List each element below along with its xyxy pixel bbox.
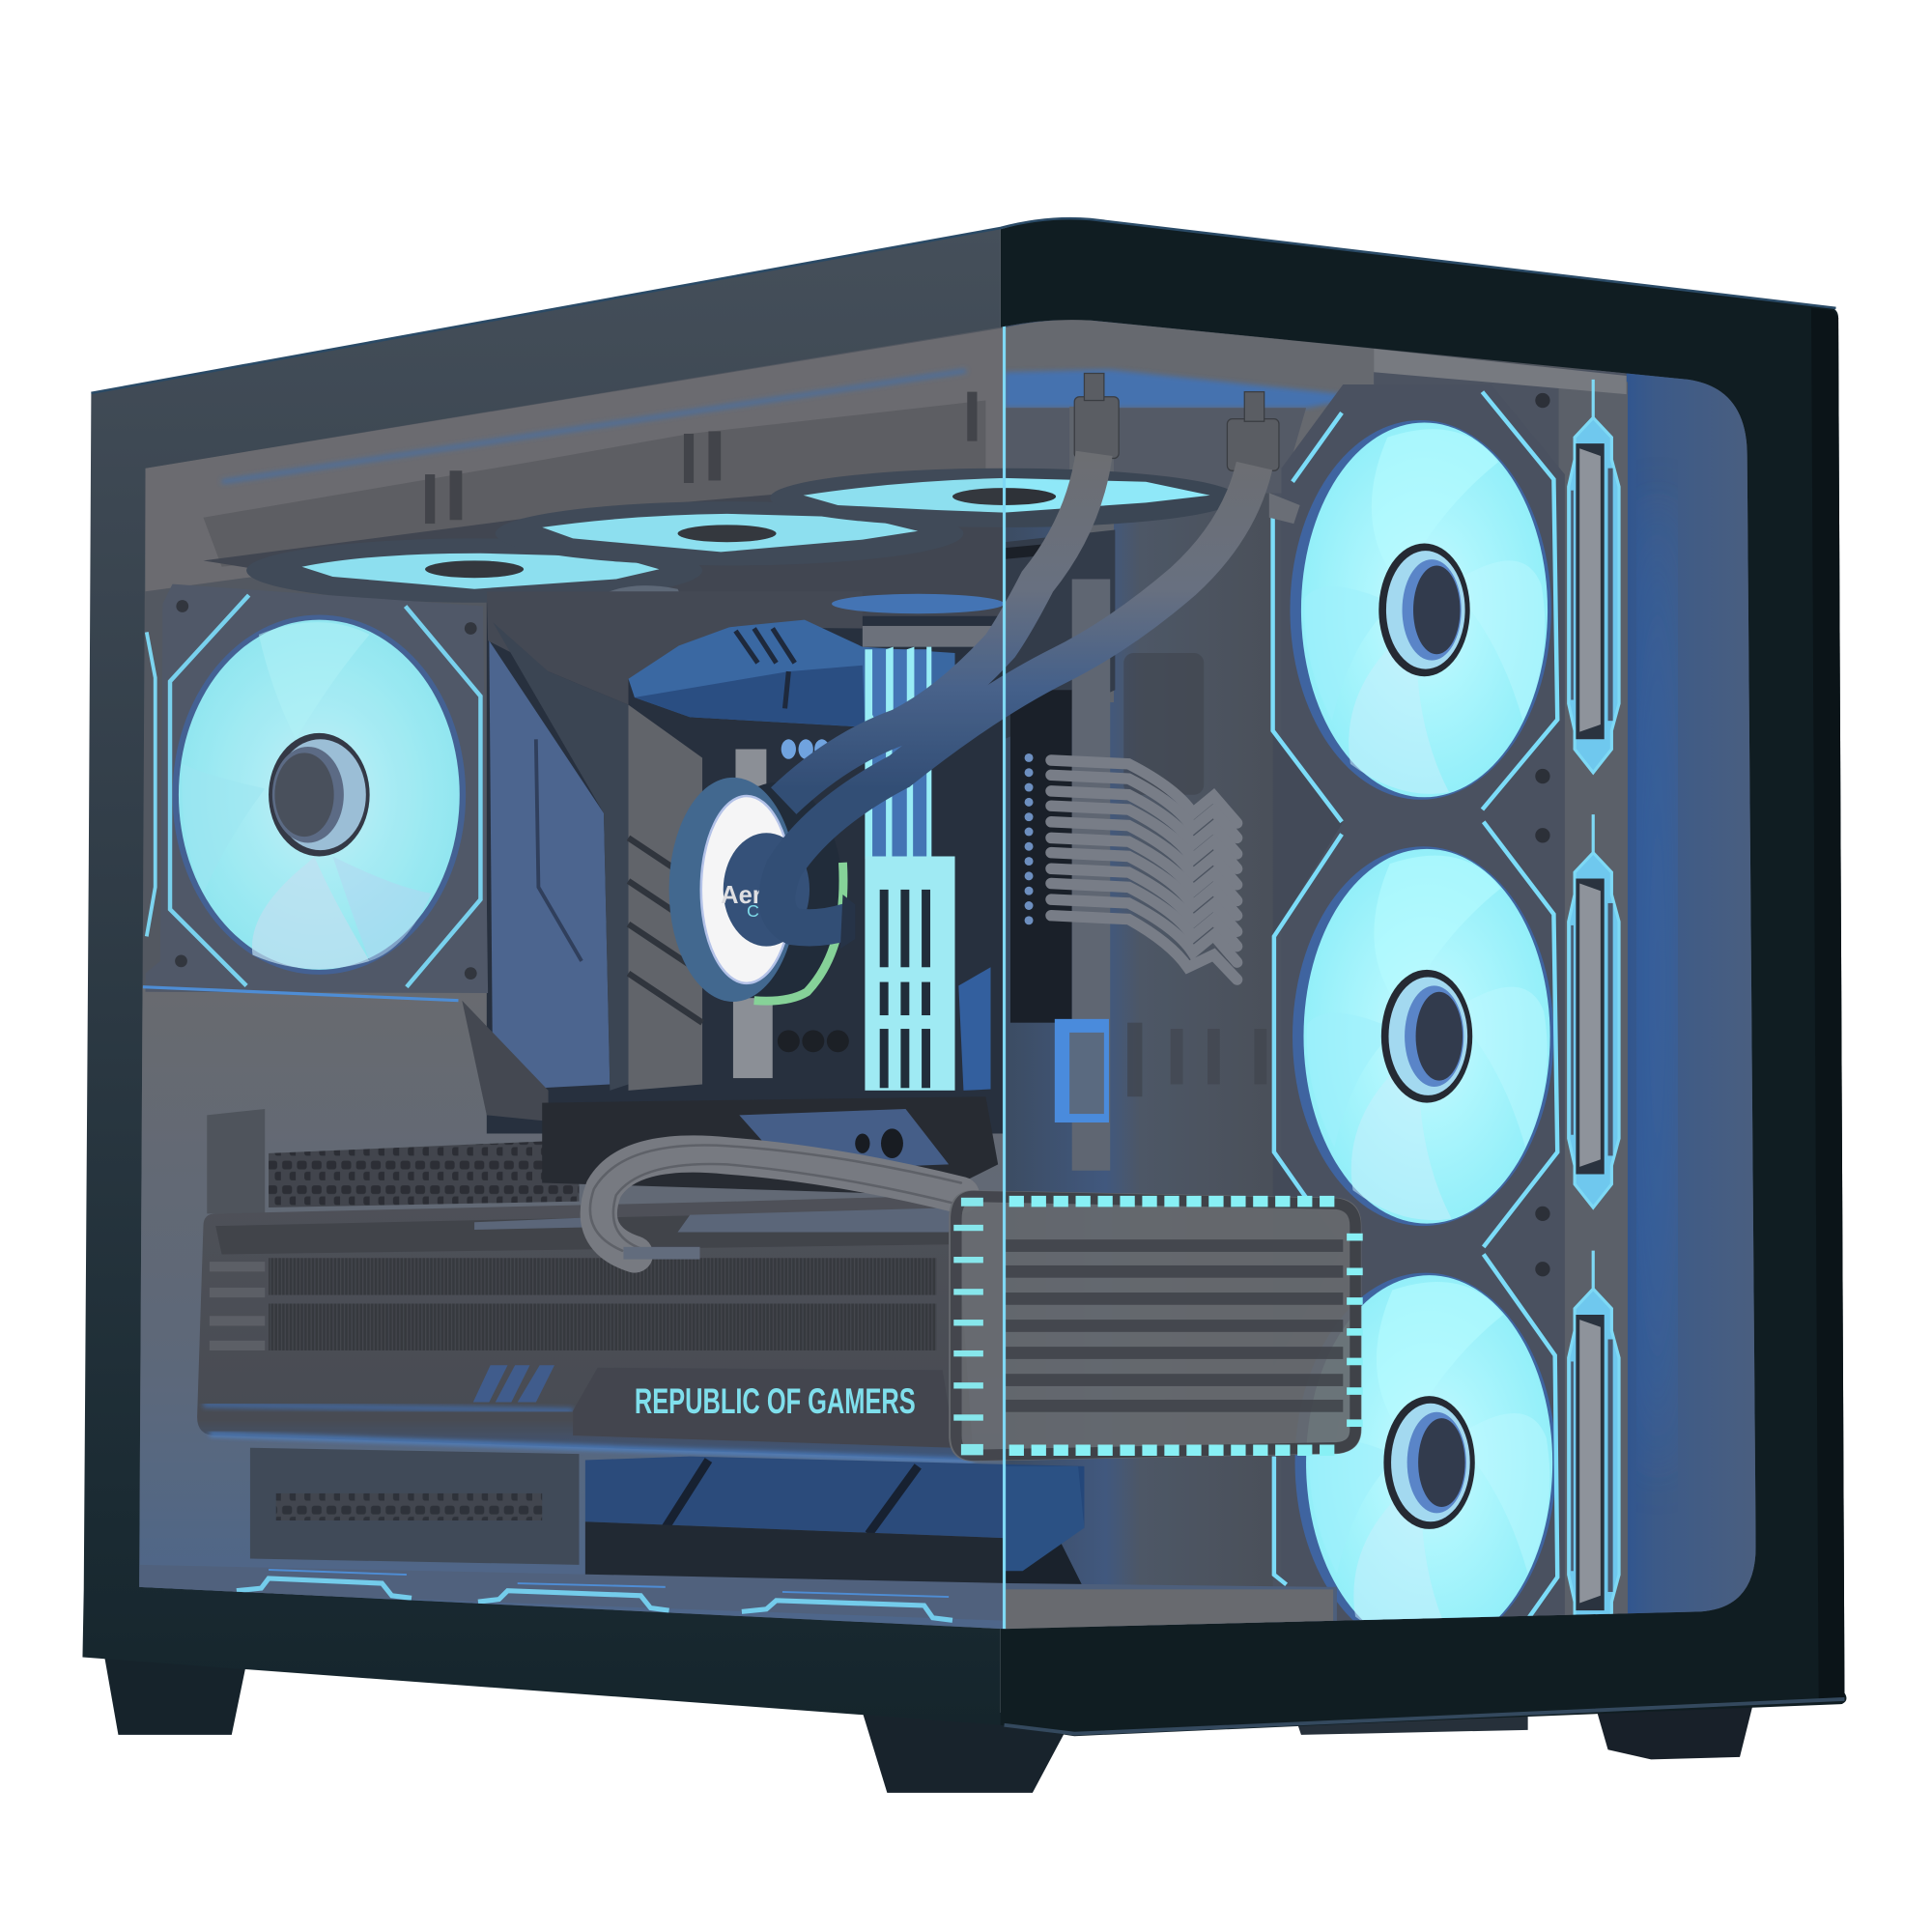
pump glass — [669, 778, 797, 1002]
cooling fan behind ram — [958, 967, 991, 1091]
backplate dark slots — [1005, 1239, 1343, 1412]
gpu top detail — [474, 1208, 961, 1233]
left fan octagon lines — [170, 595, 480, 987]
gpu top rail — [215, 1210, 949, 1254]
lower slot holes — [276, 1493, 542, 1520]
gpu blue line — [203, 1405, 573, 1410]
strip column — [1559, 382, 1628, 1627]
backplate left dashes — [953, 1198, 983, 1455]
grey striped panel — [629, 705, 702, 1091]
vertical strip 3 — [1569, 1251, 1619, 1644]
case: bottom rim — [1005, 1699, 1844, 1734]
rear blue wall — [1627, 370, 1762, 1627]
fan column block — [1273, 370, 1627, 1627]
chipset holes — [855, 1128, 903, 1158]
floor fan 3 — [742, 1592, 952, 1620]
floor fan 2 — [478, 1583, 669, 1610]
radiator blue line — [222, 371, 966, 482]
pump body — [710, 782, 842, 1005]
interior base — [124, 308, 1775, 1638]
rear wall lower left — [124, 985, 1010, 1638]
gpu lower glow — [210, 1435, 974, 1462]
pump white ring — [701, 796, 792, 983]
mobo dots — [1025, 753, 1034, 924]
backplate top dashes — [1009, 1197, 1337, 1206]
heatsink stripes — [735, 629, 795, 708]
fan screws — [1535, 393, 1550, 1276]
mobo light edge — [1072, 579, 1110, 1171]
foot: right — [1592, 1688, 1757, 1759]
shroud dark diagonal — [462, 1001, 549, 1122]
left fan screws — [175, 600, 477, 980]
top radiator band — [146, 327, 1005, 591]
right chamber — [1005, 321, 1288, 1627]
diagonal panel — [493, 622, 629, 1091]
radiator dark blocks — [203, 401, 985, 567]
heatsink lower — [635, 666, 865, 727]
lower rear wall details — [207, 1109, 265, 1213]
chipset fan glow — [832, 594, 1005, 613]
side wall top — [487, 591, 863, 705]
left side strip — [147, 632, 156, 936]
pillar behind tubes upper board — [1005, 529, 1115, 739]
side blue panel shadow — [536, 739, 582, 961]
capacitors row — [778, 1030, 849, 1052]
side blue panel — [489, 640, 610, 1091]
pump head: C — [747, 901, 759, 921]
fan 1 right — [1290, 420, 1551, 800]
24-pin cable — [1051, 760, 1237, 980]
chipset blue plate — [739, 1109, 949, 1171]
shroud line — [143, 987, 458, 1001]
top plate — [1006, 320, 1374, 452]
gpu connector — [623, 1247, 699, 1260]
m.2 heatsink — [585, 1457, 1084, 1540]
case: left panel frame — [82, 228, 1001, 1725]
gpu shroud step — [573, 1368, 955, 1448]
backplate border shade — [956, 1197, 1355, 1455]
gpu heatsink fins bottom — [269, 1303, 936, 1350]
RAM sticks — [865, 647, 955, 1091]
backplate bottom dashes — [1009, 1446, 1341, 1455]
m.2 heatsink dark cuts — [666, 1460, 918, 1534]
GPU logo text: REPUBLIC OF GAMERS — [635, 1381, 916, 1421]
hose: upper tube — [783, 453, 1094, 801]
floor grey block — [1005, 1589, 1333, 1633]
foot: centre — [859, 1700, 1072, 1793]
underside rail — [1293, 1707, 1528, 1735]
hose: lower tube — [777, 466, 1254, 927]
pump green ring — [754, 863, 843, 1001]
floor fan 1 — [237, 1570, 412, 1598]
top plate blue glow — [1005, 370, 1368, 408]
interior seen through glass — [124, 308, 1775, 1652]
lower pci slot — [250, 1448, 579, 1565]
top fan 3 — [770, 469, 1238, 527]
atx inner — [1069, 1033, 1104, 1114]
floor fan tray — [139, 1565, 1337, 1633]
mobo chamber — [487, 579, 1029, 1133]
left fan hub — [269, 733, 370, 856]
foot: left — [103, 1651, 247, 1735]
pump head — [669, 778, 843, 1005]
hose fittings — [1074, 373, 1279, 470]
atx connector — [1055, 1019, 1109, 1122]
backplate — [949, 1190, 1363, 1462]
backplate right dashes — [1347, 1234, 1363, 1427]
pump logo text: Aero — [721, 882, 777, 909]
hose elbow collar — [840, 895, 855, 949]
board row dots — [1006, 545, 1041, 559]
right fan frames — [1273, 384, 1565, 1627]
glass haze — [135, 321, 1005, 1638]
pillar behind hoses — [1069, 407, 1114, 702]
vertical strip 1 — [1569, 380, 1619, 773]
fan 3 right — [1295, 1273, 1556, 1652]
case: right edge strip — [1811, 308, 1844, 1700]
vertical strip 2 — [1569, 814, 1619, 1208]
top fan 1 — [246, 553, 659, 603]
right chamber inset — [1273, 727, 1343, 1368]
sleeved cables at top — [610, 585, 679, 591]
mobo right edge — [1010, 690, 1072, 1023]
board grey top — [735, 750, 766, 786]
gpu power cable — [590, 1146, 961, 1254]
case: front right panel frame — [1001, 218, 1846, 1736]
gpu heatsink fins top — [269, 1258, 936, 1295]
left fan frame — [146, 584, 488, 993]
gpu support block — [542, 1096, 998, 1195]
vrm heatsink — [629, 620, 955, 727]
grey panel stripes — [629, 838, 702, 1023]
dark drive slots — [1123, 653, 1266, 1096]
glow on rear wall — [1640, 493, 1674, 1479]
lower board — [585, 1521, 1084, 1589]
fan 2 right — [1293, 846, 1553, 1226]
glass seam — [1003, 323, 1006, 1629]
radiator dark ledge — [204, 495, 1003, 616]
top fan 2 — [521, 502, 918, 563]
gpu body — [197, 1195, 974, 1462]
case: top edge highlight — [91, 218, 1836, 393]
pump cap — [724, 833, 810, 947]
board grey traces — [733, 998, 773, 1078]
gpu side ribs — [210, 1262, 265, 1350]
blue capacitor dots — [781, 739, 859, 759]
gpu shroud slashes — [473, 1365, 554, 1403]
left fan ring — [173, 614, 466, 975]
fan octagon lines — [1273, 392, 1557, 1619]
top plate lower fade — [1005, 408, 1306, 493]
top plate shadow bar — [1374, 349, 1627, 394]
lower right drive plate — [1005, 1466, 1084, 1571]
radiator brackets — [425, 392, 977, 524]
tube upper bracket — [1269, 493, 1300, 524]
ram slot bracket — [863, 626, 1005, 647]
pci slot upper — [269, 1140, 579, 1208]
illustration: tempered glass PC case — [82, 216, 1847, 1793]
